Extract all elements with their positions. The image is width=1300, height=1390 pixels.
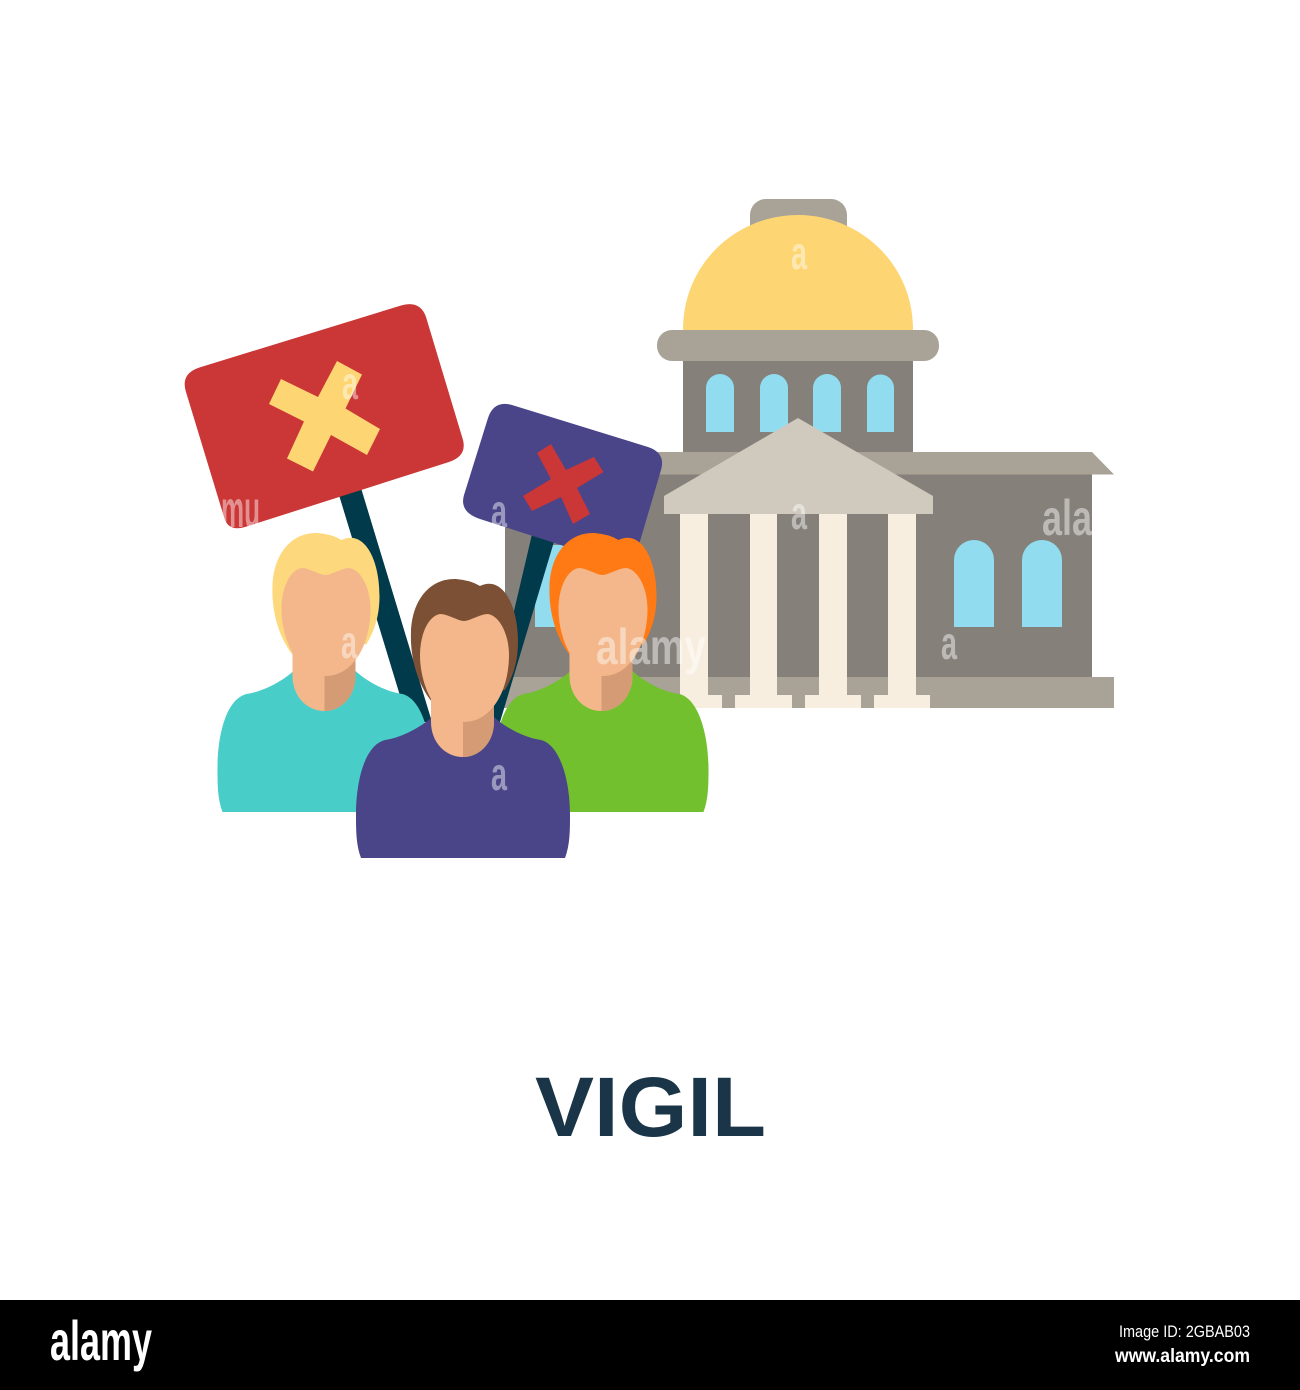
roof band bbox=[483, 452, 1114, 474]
title: VIGIL bbox=[535, 1060, 766, 1154]
watermarks bbox=[221, 227, 1093, 800]
blue protest sign bbox=[463, 404, 662, 566]
main wall bbox=[505, 470, 1092, 680]
footer logo: alamy bbox=[50, 1309, 152, 1372]
left wing window bbox=[535, 545, 566, 627]
red cross bbox=[523, 444, 604, 524]
watermarks: a bbox=[491, 485, 507, 537]
column feet bbox=[665, 695, 930, 708]
person: red hair, green shirt bbox=[494, 533, 708, 812]
watermarks: ala bbox=[1042, 490, 1093, 546]
watermarks: a bbox=[341, 616, 357, 668]
red protest sign bbox=[185, 304, 464, 528]
dome ring bbox=[657, 330, 939, 361]
watermarks: mu bbox=[221, 481, 260, 539]
sign sticks bbox=[339, 488, 556, 722]
watermarks: a bbox=[791, 227, 807, 279]
lantern on dome bbox=[750, 199, 847, 249]
columns bbox=[680, 514, 916, 696]
watermarks: alamy bbox=[596, 619, 706, 675]
wing windows bbox=[954, 540, 1062, 627]
image id: Image ID: 2GBAB03 bbox=[1119, 1322, 1250, 1341]
pediment bbox=[664, 418, 933, 514]
watermarks: a bbox=[491, 748, 507, 800]
website: www.alamy.com bbox=[1114, 1346, 1250, 1367]
watermarks: a bbox=[342, 357, 358, 409]
base bbox=[503, 677, 1114, 708]
drum windows bbox=[706, 374, 894, 432]
person: brown hair, navy shirt bbox=[356, 579, 570, 858]
person: blonde, teal shirt bbox=[218, 533, 432, 812]
drum bbox=[683, 355, 913, 455]
dome bbox=[683, 215, 913, 330]
footer bar bbox=[0, 1300, 1300, 1390]
yellow cross bbox=[269, 361, 380, 472]
watermarks: a bbox=[791, 487, 807, 539]
icon: government building bbox=[483, 199, 1114, 708]
watermarks: a bbox=[941, 617, 957, 669]
